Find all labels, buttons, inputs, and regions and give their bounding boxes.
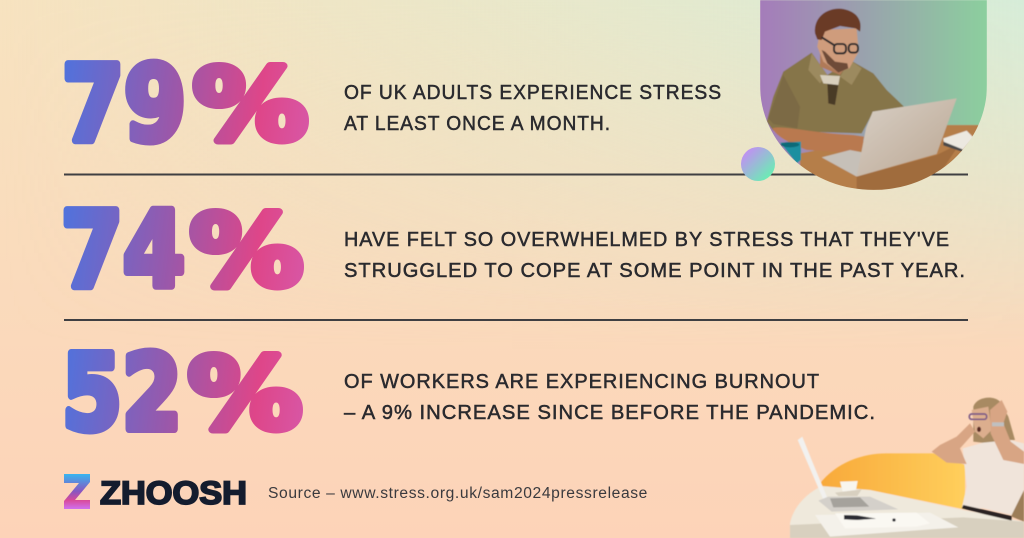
gradient circle accent (741, 147, 775, 181)
statistic: 52%: 52 (62, 332, 182, 454)
photo: stressed woman at desk (790, 398, 1024, 538)
statement: overwhelmed by stress: STRUGGLED TO COPE AT SOME POINT IN THE PAST YEAR. (344, 259, 966, 282)
statistic: 79%: 79 (62, 43, 186, 165)
statement: worker burnout: – A 9% INCREASE SINCE BEFORE THE PANDEMIC. (344, 401, 876, 424)
mug (780, 142, 801, 163)
divider lines (64, 174, 968, 320)
statistic: 74% (61, 189, 303, 311)
statement: UK adults stress (344, 81, 722, 135)
papers and pen (815, 513, 958, 537)
hair (973, 398, 1015, 443)
glasses (969, 414, 987, 419)
desk (800, 124, 978, 189)
logo mark (64, 474, 90, 509)
notebook (943, 131, 973, 150)
desk (790, 486, 1024, 538)
source note: Source – www.stress.org.uk/sam2024pressrelease (268, 485, 648, 502)
statistic: 79% (62, 43, 308, 165)
laptop (822, 150, 864, 177)
hair (815, 9, 861, 40)
statement: UK adults stress: AT LEAST ONCE A MONTH. (344, 112, 611, 135)
statistic: 74%: 74 (61, 189, 185, 311)
statement: worker burnout: OF WORKERS ARE EXPERIENCING BURNOUT (344, 370, 820, 393)
yellow arc (819, 453, 965, 509)
statement: overwhelmed by stress (344, 228, 966, 282)
chair (1012, 470, 1024, 522)
statistic: 52% (62, 332, 302, 454)
laptop (798, 437, 832, 508)
statistic: 79%: % (193, 49, 308, 163)
photo: man working on laptop (760, 0, 987, 200)
arm (772, 128, 864, 153)
arms (932, 423, 975, 464)
statistic: 74%: % (190, 195, 303, 309)
woman body (962, 440, 1024, 515)
statistic: 52%: % (188, 338, 302, 452)
statement: UK adults stress: OF UK ADULTS EXPERIENCE STRESS (344, 81, 722, 104)
statement: worker burnout (344, 370, 876, 424)
face (972, 407, 992, 438)
neck and face (820, 54, 843, 75)
cup (835, 489, 862, 496)
logo: Zhoosh (64, 474, 247, 511)
shirt (767, 53, 904, 133)
logo wordmark: ZHOOSH (100, 475, 247, 511)
statement: overwhelmed by stress: HAVE FELT SO OVERWHELMED BY STRESS THAT THEY'VE (344, 228, 950, 251)
glasses (822, 37, 858, 53)
